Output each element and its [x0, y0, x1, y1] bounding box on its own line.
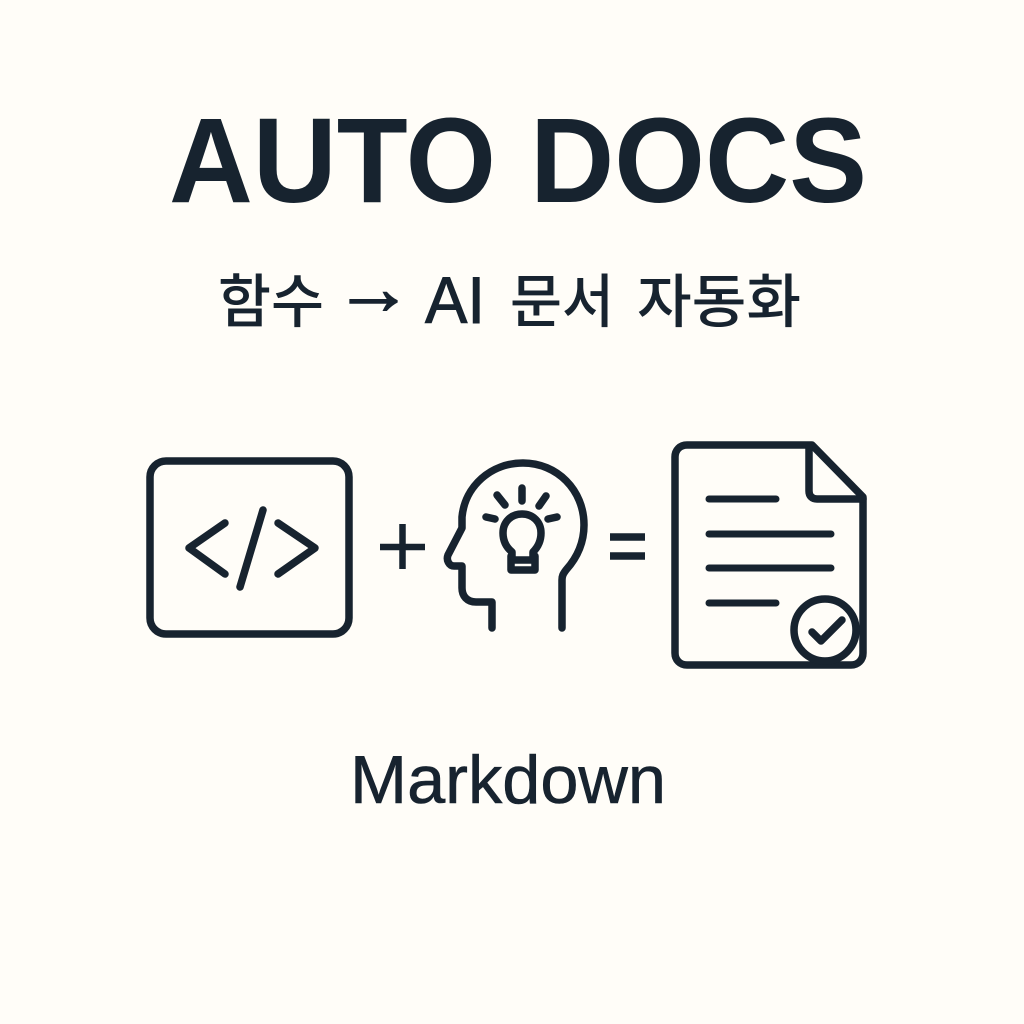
light rays	[486, 488, 557, 519]
label: Markdown: Markdown	[350, 742, 666, 818]
page outline	[675, 445, 863, 665]
title	[169, 92, 867, 228]
title: DOCS	[530, 92, 867, 228]
text lines	[709, 499, 831, 603]
icon: document with check badge	[675, 445, 863, 665]
title: AUTO	[169, 92, 496, 228]
subtitle: 함수	[218, 270, 324, 335]
check badge	[794, 599, 856, 661]
subtitle	[218, 246, 801, 337]
subtitle: AI	[425, 263, 485, 337]
icon: code window	[150, 461, 349, 634]
lightbulb	[503, 514, 541, 570]
head outline	[447, 463, 584, 628]
subtitle: 문서	[510, 270, 614, 335]
folded corner	[809, 447, 863, 499]
subtitle: 자동화	[637, 270, 801, 335]
icon: head with lightbulb	[447, 463, 584, 628]
plus sign	[380, 524, 425, 569]
equals sign	[610, 537, 645, 556]
subtitle: →	[334, 246, 413, 331]
